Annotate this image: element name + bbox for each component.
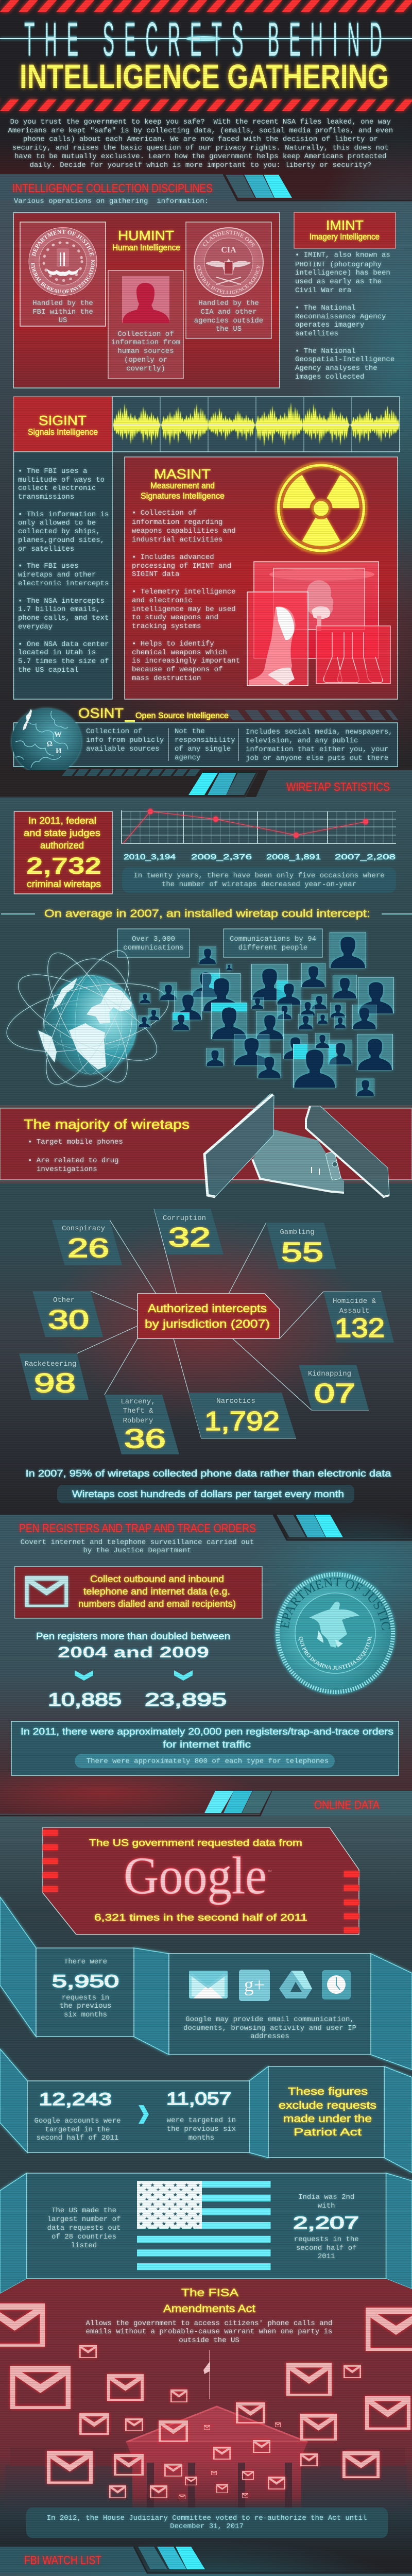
OSINT column 1: available sources bbox=[86, 745, 160, 753]
callout: twenty years: the number of wiretaps decreased year-on-year bbox=[162, 880, 356, 889]
IMINT text: • The National bbox=[295, 347, 356, 355]
panel text: addresses bbox=[250, 2032, 289, 2041]
title bbox=[0, 12, 412, 95]
phone back bbox=[252, 1129, 344, 1193]
stat: homicide: Homicide & bbox=[333, 1297, 376, 1306]
text: CIA role: CIA and other bbox=[200, 308, 257, 316]
MASINT text: SIGINT data bbox=[132, 570, 179, 579]
year labels: 2008_1,891 bbox=[266, 853, 321, 861]
panel: countries bbox=[27, 2173, 386, 2279]
text: US largest: of 28 countries bbox=[52, 2233, 116, 2241]
decorative stripes bbox=[229, 710, 394, 720]
FISA heading: Amendments Act bbox=[163, 2303, 255, 2315]
heading: PEN REGISTERS AND TRAP AND TRACE ORDERS bbox=[19, 1521, 256, 1535]
text: human sources: Collection of bbox=[117, 330, 174, 338]
arrow: chevron bbox=[139, 2105, 149, 2124]
MASINT text: industrial activities bbox=[132, 536, 222, 544]
caption previous: were targeted in bbox=[167, 2116, 236, 2125]
callout: twenty years: In twenty years, there have been only five occasions where bbox=[133, 872, 385, 880]
FISA description: emails without a probable-cause warrant when one party is bbox=[86, 2328, 332, 2336]
OSINT column 3: information that either you, your bbox=[246, 745, 388, 754]
IMINT text: intelligence) has been bbox=[295, 269, 390, 277]
year labels bbox=[124, 853, 396, 861]
MASINT text: • Collection of bbox=[132, 509, 197, 517]
stat: homicide: Assault bbox=[339, 1307, 369, 1315]
MASINT text: is increasingly important bbox=[132, 657, 240, 665]
value previous: 11,057 bbox=[166, 2089, 231, 2109]
text: FBI role: Handled by the bbox=[32, 299, 93, 308]
SIGINT text bbox=[13, 452, 112, 699]
text: pen registers doubled: Pen registers more than doubled between bbox=[36, 1631, 230, 1641]
human sources box bbox=[108, 270, 183, 379]
stat intro text: authorized bbox=[40, 840, 84, 851]
SIGINT text: wiretaps and other bbox=[18, 571, 96, 579]
OSINT underscore bbox=[125, 720, 135, 722]
icon: wikipedia globe: Ω bbox=[46, 740, 53, 749]
MASINT text: and electronic bbox=[132, 597, 193, 605]
heading: intercept average: On average in 2007, an installed wiretap could intercept: bbox=[44, 908, 370, 920]
caption: requests in the bbox=[294, 2235, 359, 2244]
callout: communications bbox=[117, 929, 190, 957]
years: 2004 and 2009 bbox=[58, 1644, 209, 1661]
icon: wikipedia globe bbox=[12, 708, 81, 774]
callout: re-authorized: December 31, 2017 bbox=[170, 2522, 244, 2531]
SIGINT text: • One NSA data center bbox=[18, 640, 109, 649]
OSINT column 2: agency bbox=[175, 754, 200, 762]
text: US largest: listed bbox=[71, 2242, 97, 2250]
band heading: The majority of wiretaps bbox=[24, 1116, 190, 1132]
panel: FISA amendments act bbox=[0, 2279, 412, 2524]
section header: FBI watch list bbox=[0, 2547, 412, 2573]
SIGINT text: everyday bbox=[18, 623, 53, 631]
panel: patriot act note bbox=[268, 2066, 384, 2158]
icon: envelope bbox=[25, 1576, 68, 1607]
caption previous: months bbox=[188, 2134, 214, 2142]
OSINT subheading: Open Source Intelligence bbox=[135, 711, 229, 720]
panel text: documents, browsing activity and user IP bbox=[183, 2024, 356, 2032]
intro text: security, and raises the basic question of our privacy rights. Naturally, this does not bbox=[12, 144, 389, 152]
panel: patriot act note: These figures bbox=[288, 2086, 368, 2097]
icon: american flag bbox=[137, 2181, 271, 2270]
heading: WIRETAP STATISTICS bbox=[286, 780, 390, 793]
icon: FBI seal bbox=[29, 227, 97, 296]
icon: google plus bbox=[239, 1970, 270, 2001]
arrow: down left bbox=[75, 1670, 93, 1681]
panel: HUMINT bbox=[13, 212, 280, 388]
caption second half: targeted in the bbox=[45, 2126, 110, 2134]
stat: other: 30 bbox=[48, 1305, 89, 1335]
heading: FBI WATCH LIST bbox=[24, 2553, 101, 2567]
SIGINT text: • The FBI uses a bbox=[18, 467, 87, 476]
IMINT text: used as early as the bbox=[295, 278, 382, 286]
google wordmark: Google bbox=[124, 1846, 267, 1905]
SIGINT text: electronic intercepts bbox=[18, 580, 109, 588]
illustration: mobile phones bbox=[204, 1094, 389, 1197]
panel text: Google may provide email communication, bbox=[185, 2015, 354, 2024]
text: pen registers doubled bbox=[36, 1631, 230, 1710]
HUMINT heading: HUMINT bbox=[118, 228, 174, 243]
icon: CIA seal: CLANDESTINE OPS bbox=[203, 230, 255, 247]
MASINT text: mass destruction bbox=[132, 674, 201, 683]
year labels: 2007_2,208 bbox=[335, 853, 396, 861]
panel: IMINT bbox=[294, 212, 396, 381]
MASINT text: chemical weapons which bbox=[132, 649, 227, 657]
HUMINT subheading: Human Intelligence bbox=[112, 243, 180, 252]
IMINT text: • The National bbox=[295, 304, 356, 312]
flow chart: authorized intercepts bbox=[19, 1209, 394, 1454]
heading: INTELLIGENCE COLLECTION DISCIPLINES bbox=[12, 181, 213, 195]
stat: corruption: 32 bbox=[168, 1223, 211, 1252]
IMINT text: Civil War era bbox=[295, 286, 351, 295]
chart: wiretaps by year bbox=[122, 809, 396, 893]
value 2009: 23,895 bbox=[145, 1690, 227, 1710]
SIGINT text: • This information is bbox=[18, 511, 109, 519]
OSINT column 2: of any single bbox=[175, 745, 231, 753]
callout: wiretap cost bbox=[57, 1485, 354, 1503]
OSINT column 1: Collection of bbox=[86, 727, 142, 736]
stat: larceny bbox=[105, 1395, 179, 1454]
SIGINT text: only allowed to be bbox=[18, 519, 96, 528]
caption: requests in bbox=[62, 1994, 109, 2002]
IMINT subheading: Imagery Intelligence bbox=[310, 232, 380, 242]
stat: narcotics bbox=[188, 1393, 296, 1438]
caption previous: the previous six bbox=[167, 2125, 236, 2133]
stat: other: Other bbox=[53, 1296, 75, 1304]
IMINT heading: IMINT bbox=[326, 217, 364, 233]
OSINT column 1: info from publicly bbox=[86, 736, 164, 744]
callout: twenty years bbox=[122, 867, 396, 893]
big number: 5,950 bbox=[52, 1972, 119, 1991]
MASINT text: because of weapons of bbox=[132, 666, 222, 674]
FBI box bbox=[20, 222, 106, 327]
SIGINT text: • The FBI uses bbox=[18, 562, 79, 570]
panel: collect data bbox=[14, 1567, 262, 1618]
caption second half: second half of 2011 bbox=[37, 2134, 118, 2142]
stat: racketeering: Racketeering bbox=[25, 1360, 76, 1368]
MASINT text: • Helps to identify bbox=[132, 640, 214, 648]
panel text: numbers dialled and email recipients) bbox=[78, 1599, 236, 1609]
stat: narcotics: 1,792 bbox=[204, 1406, 280, 1436]
MASINT text: processing of IMINT and bbox=[132, 562, 231, 570]
MASINT text: information regarding bbox=[132, 518, 222, 527]
caption: second half of bbox=[296, 2244, 357, 2252]
MASINT heading: MASINT bbox=[154, 466, 211, 482]
year labels: 2009_2,376 bbox=[191, 853, 252, 861]
panel: google requests bbox=[43, 1827, 359, 1935]
value second half: 12,243 bbox=[39, 2090, 112, 2109]
icon: FBI seal: DEPARTMENT OF JUSTICE bbox=[31, 230, 94, 257]
chart: signal waveform bbox=[112, 397, 400, 452]
section header: online data bbox=[0, 1791, 412, 1816]
SIGINT text: multitude of ways to bbox=[18, 476, 105, 484]
stat: gambling: 55 bbox=[281, 1238, 323, 1267]
value 2004: 10,885 bbox=[48, 1690, 122, 1710]
image collage: nuclear and chemical bbox=[247, 562, 390, 686]
icon: CIA seal: CIA bbox=[221, 246, 236, 255]
text: US largest: The US made the bbox=[52, 2207, 116, 2215]
panel text: Collect outbound and inbound bbox=[90, 1574, 224, 1584]
stat intro text: and state judges bbox=[24, 828, 100, 838]
text: human sources: information from bbox=[111, 338, 180, 347]
line series bbox=[123, 809, 368, 843]
section header: pen registers bbox=[0, 1515, 412, 1555]
text: human sources: covertly) bbox=[126, 365, 165, 373]
illustration: courthouse bbox=[5, 2350, 407, 2514]
trademark: ™ bbox=[267, 1869, 272, 1874]
MASINT text: intelligence may be used bbox=[132, 605, 236, 614]
caption: 2011 bbox=[318, 2252, 335, 2261]
header stripes top bbox=[0, 0, 412, 12]
text: CIA role: Handled by the bbox=[198, 299, 259, 308]
IMINT text: Geospatial-Intelligence bbox=[295, 355, 394, 364]
illustration: envelopes bbox=[0, 2303, 412, 2499]
stat: larceny: Larceny, bbox=[121, 1398, 156, 1406]
callout: telephones bbox=[75, 1754, 335, 1768]
SIGINT text: collect electronic bbox=[18, 484, 96, 493]
FISA heading: The FISA bbox=[181, 2287, 238, 2299]
SIGINT text: 5.7 times the size of bbox=[18, 657, 109, 666]
panel: OSINT bbox=[12, 705, 398, 774]
OSINT column 3: television, and any public bbox=[246, 737, 358, 745]
callout: communications: communications bbox=[123, 944, 184, 952]
MASINT subheading: Measurement and bbox=[150, 481, 215, 490]
panel: MASINT bbox=[125, 457, 398, 699]
title glow line bbox=[0, 36, 412, 41]
text: 95 percent: In 2007, 95% of wiretaps collected phone data rather than electronic data bbox=[26, 1468, 392, 1479]
stat: corruption bbox=[154, 1209, 224, 1255]
title line 1: THE SECRETS BEHIND bbox=[24, 12, 382, 66]
text: US largest: data requests out bbox=[47, 2224, 121, 2232]
stat: racketeering bbox=[19, 1353, 89, 1400]
heading: ONLINE DATA bbox=[314, 1798, 380, 1811]
text: FBI role: US bbox=[59, 316, 67, 325]
band bullets: • Target mobile phones bbox=[28, 1138, 123, 1146]
MASINT subheading: Signatures Intelligence bbox=[141, 491, 225, 501]
text: CIA role: the US bbox=[216, 325, 242, 333]
google intro: The US government requested data from bbox=[89, 1838, 302, 1848]
IMINT text: operates imagery bbox=[295, 321, 364, 329]
CIA box bbox=[185, 222, 272, 339]
SIGINT text: phone calls, and text bbox=[18, 614, 109, 622]
panel: patriot act note: exclude requests bbox=[279, 2100, 376, 2111]
IMINT text: PHOTINT (photography bbox=[295, 261, 382, 269]
SIGINT text: located in Utah is bbox=[18, 649, 96, 657]
big number: 2,207 bbox=[293, 2213, 359, 2233]
stat: larceny: Robbery bbox=[123, 1417, 153, 1425]
OSINT column 3: Includes social media, newspapers, bbox=[246, 728, 393, 736]
icon: radiation symbol bbox=[278, 465, 364, 551]
icon: clock bbox=[322, 1970, 351, 1999]
callout: re-authorized: In 2012, the House Judiciary Committee voted to re-authorize the Act until bbox=[47, 2514, 367, 2522]
header stripes bottom bbox=[0, 99, 412, 111]
text: human sources: (openly or bbox=[124, 356, 167, 364]
icon: silhouette bbox=[122, 276, 169, 323]
SIGINT text: 1.7 billion emails, bbox=[18, 605, 100, 614]
MASINT text: • Includes advanced bbox=[132, 553, 214, 562]
panel: 5950 requests: There were bbox=[64, 1958, 107, 1966]
caption: the previous bbox=[60, 2002, 111, 2010]
icon: CIA seal: CENTRAL INTELLIGENCE AGENCY bbox=[197, 265, 261, 294]
text: India: India was 2nd bbox=[298, 2193, 354, 2201]
panel: internet traffic orders bbox=[11, 1721, 399, 1775]
callout: people bbox=[224, 929, 322, 957]
OSINT heading: OSINT bbox=[78, 705, 124, 721]
center box: by jurisdiction (2007) bbox=[145, 1317, 270, 1330]
intro text: phone calls) about each American. We are now faced with the decision of liberty or bbox=[23, 135, 378, 144]
arrow: down right bbox=[174, 1670, 193, 1681]
big number: 2,732 bbox=[26, 853, 101, 879]
red bars bbox=[43, 1830, 359, 1933]
intro text: Americans are kept "safe" is by collecting data, (emails, social media profiles, and even bbox=[8, 127, 393, 135]
MASINT text: tracking systems bbox=[132, 622, 201, 631]
panel: criminal wiretaps stat bbox=[14, 811, 112, 894]
MASINT text: weapons capabilities and bbox=[132, 527, 236, 535]
OSINT column 2: Not the bbox=[175, 727, 205, 736]
callout: communications: Over 3,000 bbox=[132, 935, 175, 943]
intro text: Do you trust the government to keep you safe? With the recent NSA files leaked, one way bbox=[10, 118, 391, 126]
SIGINT text: collected by ships, bbox=[18, 528, 100, 536]
connector lines bbox=[77, 1209, 381, 1438]
MASINT text: • Telemetry intelligence bbox=[132, 588, 236, 596]
icon: wikipedia globe: W bbox=[54, 731, 62, 739]
text: US largest: largest number of bbox=[47, 2215, 121, 2224]
stat: homicide: 132 bbox=[335, 1313, 385, 1343]
stat: corruption: Corruption bbox=[163, 1214, 206, 1223]
band bullets: • Are related to drug bbox=[28, 1157, 118, 1165]
panel: accounts targeted bbox=[27, 2081, 249, 2153]
illustration: people under surveillance bbox=[138, 932, 394, 1096]
FISA description: Allows the government to access citizens' phone calls and bbox=[86, 2319, 332, 2328]
stat: conspiracy: 26 bbox=[67, 1233, 109, 1263]
MASINT text: to study weapons and bbox=[132, 614, 218, 622]
phone left bbox=[204, 1094, 274, 1197]
icon: department of justice seal: QUI PRO DOMINA JUSTITIA SEQUITUR bbox=[299, 1636, 372, 1670]
stat: racketeering: 98 bbox=[34, 1368, 76, 1398]
callout: telephones: There were approximately 800 of each type for telephones bbox=[87, 1757, 329, 1766]
stat: conspiracy: Conspiracy bbox=[62, 1225, 105, 1233]
stat: larceny: Theft & bbox=[123, 1407, 153, 1415]
subheading: Covert internet and telephone surveillance carried out bbox=[21, 1538, 254, 1547]
stat intro text: In 2011, federal bbox=[28, 816, 96, 826]
panel: internet traffic orders: In 2011, there were approximately 20,000 pen registers/trap-and-trace orders bbox=[21, 1726, 393, 1737]
IMINT text: Agency analyses the bbox=[295, 364, 377, 372]
callout: wiretap cost: Wiretaps cost hundreds of dollars per target every month bbox=[72, 1489, 344, 1499]
IMINT text: images collected bbox=[295, 373, 364, 381]
panel text: telephone and internet data (e.g. bbox=[83, 1586, 230, 1597]
stat: kidnapping: 07 bbox=[314, 1379, 355, 1409]
caption second half: Google accounts were bbox=[34, 2117, 121, 2125]
text: FBI role: FBI within the bbox=[32, 308, 93, 316]
band: majority of wiretaps bbox=[0, 1105, 412, 1183]
IMINT text: • IMINT, also known as bbox=[295, 251, 390, 260]
phone right bbox=[306, 1106, 389, 1197]
year labels: 2010_3,194 bbox=[124, 853, 176, 861]
icon: gmail bbox=[189, 1971, 228, 1998]
SIGINT subheading: Signals Intelligence bbox=[28, 427, 98, 437]
stat: conspiracy bbox=[52, 1220, 122, 1265]
SIGINT text: transmissions bbox=[18, 493, 74, 501]
caption: six months bbox=[64, 2011, 107, 2019]
icon: department of justice seal: DEPARTMENT OF JUSTICE bbox=[280, 1578, 390, 1630]
IMINT text: satellites bbox=[295, 330, 338, 338]
stat: larceny: 36 bbox=[124, 1424, 166, 1454]
stat: gambling bbox=[266, 1223, 336, 1269]
FISA description: outside the US bbox=[179, 2336, 239, 2345]
stat caption: criminal wiretaps bbox=[27, 879, 101, 889]
band bullets: investigations bbox=[37, 1165, 97, 1174]
panel: patriot act note: made under the bbox=[283, 2113, 372, 2125]
callout: people: Communications by 94 bbox=[230, 935, 316, 943]
text: human sources: human sources bbox=[117, 347, 174, 355]
OSINT details box bbox=[13, 723, 398, 767]
stat: kidnapping bbox=[299, 1365, 369, 1410]
SIGINT text: • The NSA intercepts bbox=[18, 597, 105, 605]
panel: google services bbox=[169, 1954, 371, 2055]
panel group: tunnel walls bbox=[0, 1897, 412, 2294]
SIGINT text: the US capital bbox=[18, 666, 79, 674]
panel: SIGINT bbox=[13, 397, 400, 699]
icon: google plus: g+ bbox=[244, 1974, 265, 1996]
text: CIA role: agencies outside bbox=[194, 317, 263, 325]
panel: 5950 requests bbox=[36, 1948, 134, 2037]
icon: drive bbox=[279, 1971, 312, 1998]
panel: internet traffic orders: for internet traffic bbox=[163, 1739, 251, 1750]
callout: re-authorized bbox=[26, 2507, 388, 2538]
grid bbox=[122, 810, 396, 843]
icon: wikipedia globe: И bbox=[56, 747, 62, 755]
stat: other bbox=[32, 1291, 103, 1337]
stat: gambling: Gambling bbox=[280, 1228, 315, 1236]
SIGINT heading: SIGINT bbox=[39, 413, 87, 428]
text: India: with bbox=[318, 2202, 335, 2210]
subheading: by the Justice Department bbox=[83, 1547, 192, 1555]
intro text: have to be mutually exclusive. Learn how the government helps keep Americans protected bbox=[14, 152, 387, 161]
panel: patriot act note: Patriot Act bbox=[294, 2127, 362, 2138]
IMINT text: Reconnaissance Agency bbox=[295, 313, 386, 321]
intro text: daily. Decide for yourself which is more important to you: liberty or security? bbox=[29, 161, 371, 170]
icon: department of justice seal bbox=[273, 1570, 397, 1696]
center box: Authorized intercepts bbox=[148, 1302, 267, 1315]
SIGINT text: planes,ground sites, bbox=[18, 536, 105, 545]
google count: 6,321 times in the second half of 2011 bbox=[94, 1912, 307, 1923]
section header: wiretap statistics bbox=[0, 770, 412, 797]
stat: homicide bbox=[323, 1292, 394, 1343]
SIGINT text: or satellites bbox=[18, 545, 74, 553]
illustration: globe with orbits bbox=[1, 940, 175, 1095]
subheading: Various operations on gathering information: bbox=[14, 197, 209, 206]
stat: narcotics: Narcotics bbox=[216, 1397, 255, 1405]
icon: CIA seal bbox=[194, 227, 264, 297]
stat: kidnapping: Kidnapping bbox=[308, 1370, 351, 1378]
section header: intelligence collection disciplines bbox=[0, 174, 412, 206]
OSINT column 2: responsibility bbox=[175, 736, 235, 744]
OSINT column 3: job or anyone else puts out there bbox=[246, 754, 388, 762]
center box bbox=[138, 1294, 280, 1338]
callout: people: different people bbox=[238, 944, 307, 952]
